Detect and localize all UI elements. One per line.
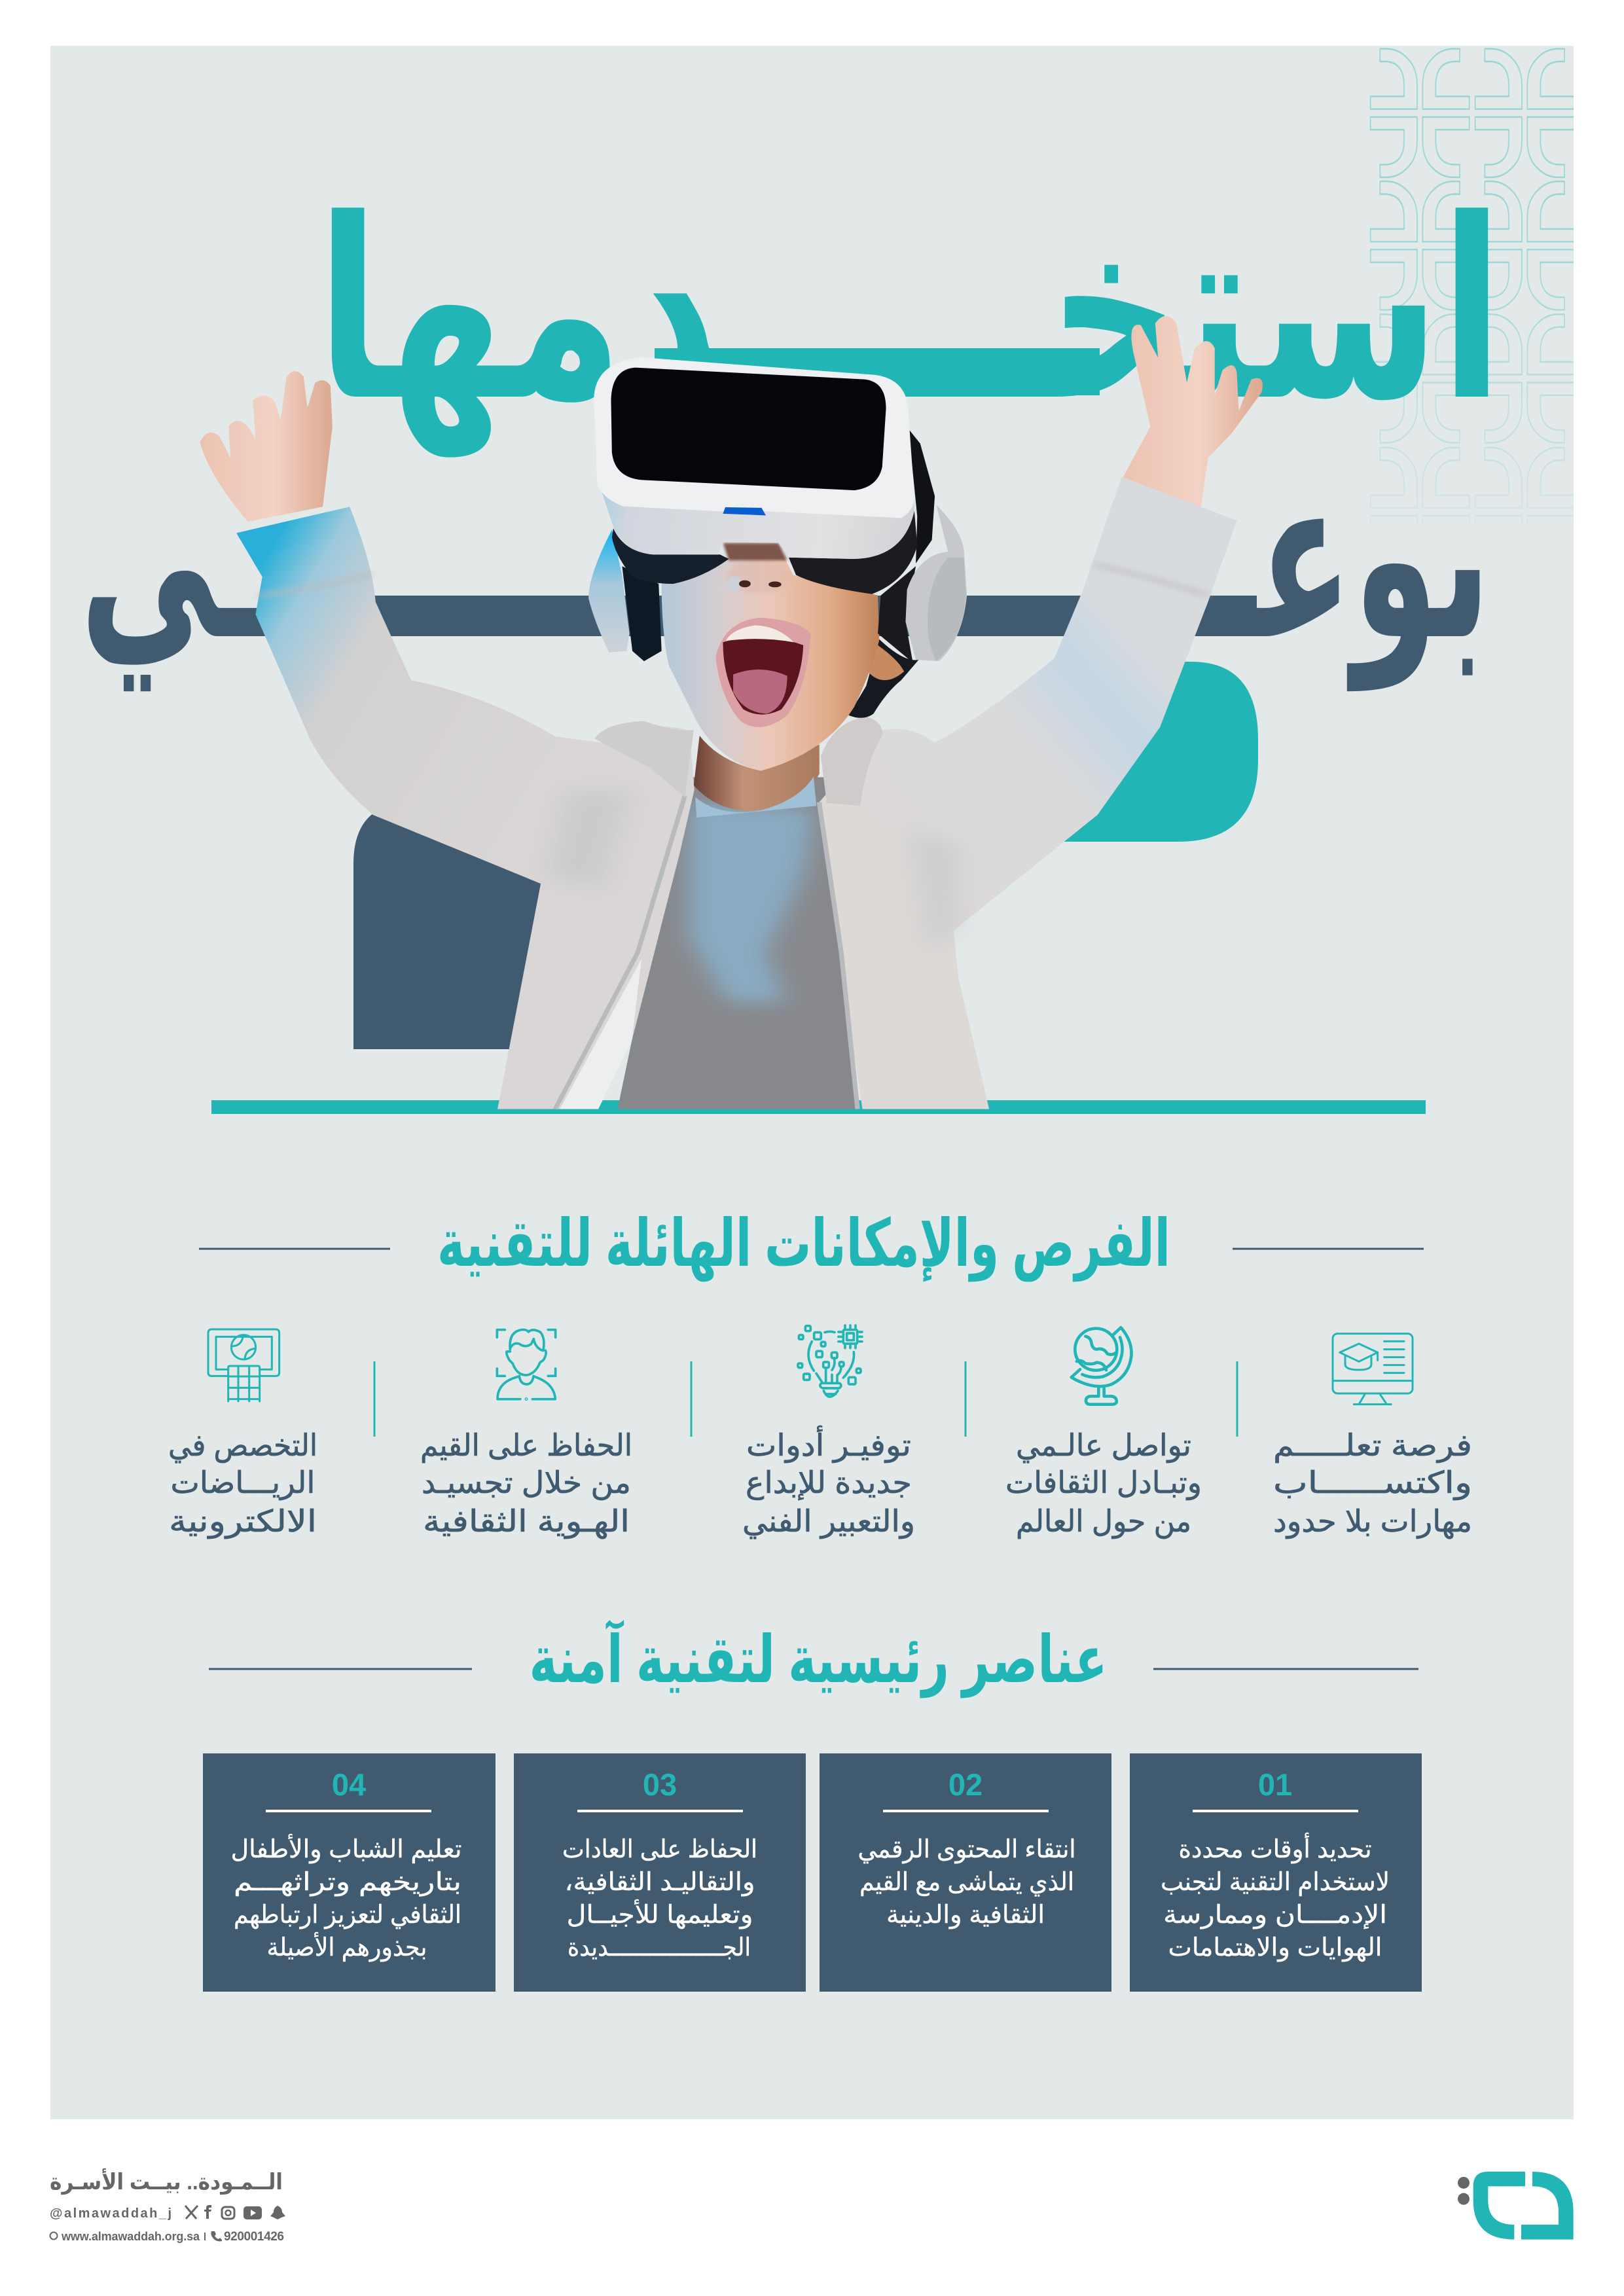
text: e-sports: الريـــاضات (170, 1465, 316, 1501)
sleeve cuff shading (257, 564, 1208, 596)
card 02: الذي يتماشى مع القيم (859, 1869, 1074, 1897)
headphone right (878, 505, 967, 662)
photo: child wearing VR headset (200, 316, 1263, 1109)
logo (1458, 2172, 1574, 2240)
card 04: بتاريخهم وتراثهـــم (234, 1869, 461, 1897)
text: global communication: تواصل عالـمي (1016, 1428, 1191, 1463)
jacket fold shading (545, 790, 958, 952)
jacket right side and sleeve (819, 476, 1236, 1109)
text: global communication: من حول العالم (1016, 1504, 1191, 1539)
text: e-sports: الالكترونية (169, 1504, 317, 1539)
text: learning: مهارات بلا حدود (1273, 1504, 1472, 1539)
text: creative tools: جديدة للإبداع (746, 1465, 912, 1500)
card 01: الهوايات والاهتمامات (1168, 1934, 1382, 1962)
text: creative tools (742, 1426, 915, 1539)
footer: handle: @almawaddah_j (50, 2206, 171, 2221)
card 02 (820, 1753, 1111, 1992)
text: creative tools: توفيـر أدوات (746, 1426, 911, 1463)
text: preserving values (420, 1428, 632, 1539)
left hand (200, 371, 333, 522)
heading: opportunities: الفرص والإمكانات الهائلة للتقنية (437, 1207, 1170, 1282)
shape: dark rounded block (353, 802, 589, 1049)
card 03 (514, 1753, 806, 1992)
footer: website and phone: www.almawaddah.org.sa (61, 2230, 200, 2243)
hair (848, 639, 919, 718)
nose (723, 543, 791, 594)
hood left (594, 721, 694, 797)
card 02: انتقاء المحتوى الرقمي (857, 1836, 1076, 1864)
face (662, 546, 879, 771)
card 03: والتقاليـد الثقافية، (564, 1869, 755, 1897)
card 01: تحديد أوقات محددة (1178, 1833, 1372, 1864)
card 04: بجذورهم الأصيلة (267, 1931, 427, 1962)
opportunities row (168, 1325, 1472, 1539)
icon: person with focus frame (497, 1330, 556, 1399)
icon: light bulb with chip (798, 1325, 862, 1397)
card 01: الإدمــــان وممارسة (1163, 1901, 1387, 1929)
headset lower body (600, 488, 914, 559)
left zipper (555, 796, 685, 1109)
card 01: 01 (1258, 1767, 1292, 1802)
hood right (821, 717, 882, 806)
shape: teal rounded block (1026, 662, 1258, 842)
ear (867, 645, 904, 680)
footer: brand name: الــمـودة.. بيــت الأسـرة (50, 2168, 283, 2195)
text: global communication: وتبـادل الثقافات (1005, 1465, 1202, 1501)
headset screen (611, 368, 886, 490)
card 03: الحفاظ على العادات (562, 1836, 757, 1863)
jacket left side and sleeve (236, 507, 695, 1109)
text: creative tools: والتعبير الفني (742, 1504, 915, 1539)
jacket lining left (560, 959, 641, 1109)
text: preserving values: من خلال تجسيـد (422, 1465, 631, 1501)
icon: monitor with graduation cap (1333, 1334, 1413, 1405)
card 04: الثقافي لتعزيز ارتباطهم (234, 1901, 461, 1929)
card 03: وتعليمها للأجيــال (567, 1899, 753, 1929)
shirt blue highlights (689, 802, 814, 1003)
right hand and forearm (1121, 316, 1263, 520)
decorative pattern: top-right (1371, 49, 1574, 576)
text: preserving values: الهـوية الثقافية (423, 1504, 630, 1539)
divider bar under photo (211, 1100, 1426, 1114)
shirt collar (695, 777, 816, 817)
footer: website and phone: 920001426 (224, 2230, 284, 2244)
text: e-sports (168, 1428, 317, 1539)
right zipper (819, 802, 857, 1109)
icon: screen with ball and grid (208, 1329, 280, 1401)
text: learning (1273, 1428, 1472, 1539)
card 04: 04 (332, 1767, 366, 1802)
card 02: الثقافية والدينية (886, 1901, 1045, 1929)
text: e-sports: التخصص في (168, 1428, 317, 1463)
text: learning: واكتســــــاب (1273, 1465, 1472, 1501)
text: learning: فرصة تعلـــــم (1273, 1428, 1472, 1463)
mouth (715, 618, 810, 727)
headphone left (588, 529, 662, 661)
heading: key elements: عناصر رئيسية لتقنية آمنة (529, 1619, 1108, 1698)
text: global communication (1005, 1428, 1202, 1539)
icon: globe (1072, 1327, 1131, 1405)
card 01 (1130, 1753, 1422, 1992)
headset blue indicator (723, 507, 766, 515)
footer: social icons (185, 2205, 285, 2219)
shirt (617, 777, 857, 1109)
headset straps (612, 429, 935, 594)
text: preserving values: الحفاظ على القيم (420, 1428, 632, 1463)
card 03: 03 (643, 1767, 677, 1802)
card 01: لاستخدام التقنية لتجنب (1161, 1869, 1390, 1896)
neck (694, 736, 820, 811)
card 03: الجـــــــــــــــــديدة (568, 1934, 751, 1962)
headset front (594, 357, 914, 518)
card 02: 02 (948, 1767, 983, 1802)
card 04 (203, 1753, 496, 1992)
card 04: تعليم الشباب والأطفال (230, 1833, 462, 1864)
footer: website and phone (50, 2230, 284, 2244)
